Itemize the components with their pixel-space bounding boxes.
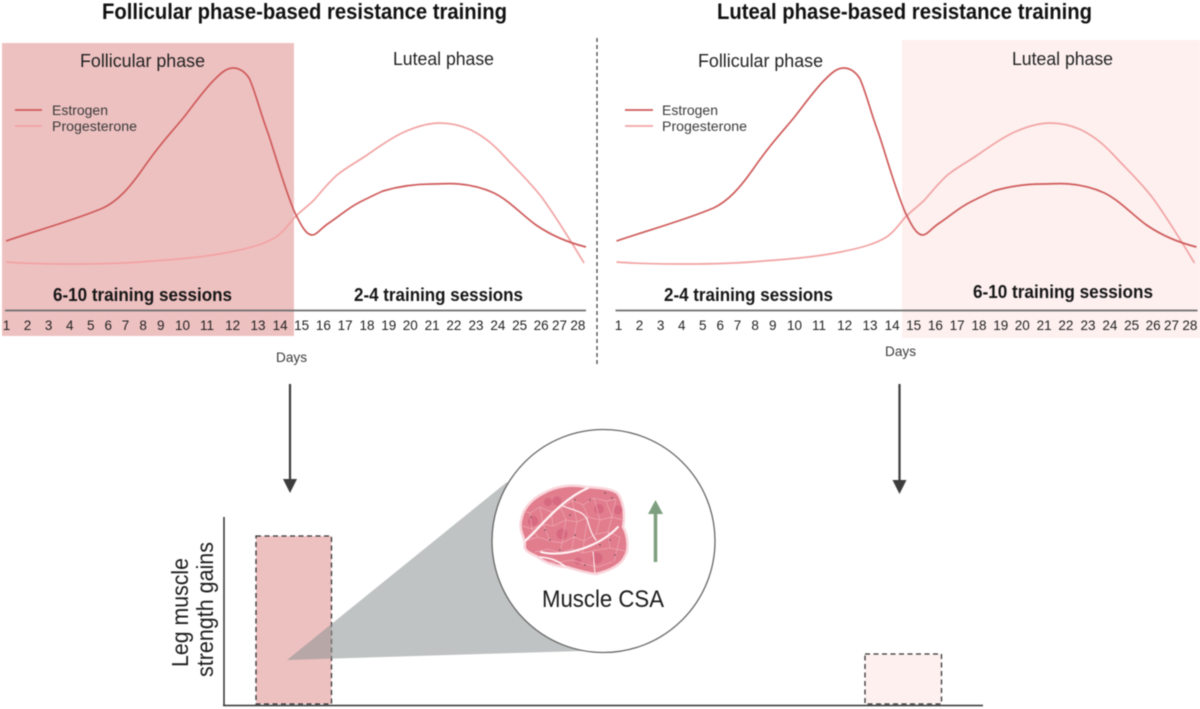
y axis label line two: strength gains (192, 542, 218, 677)
left day axis: 10 (175, 318, 190, 333)
right day axis: 21 (1037, 318, 1052, 333)
bar chart: leg muscle strength gains (167, 517, 983, 706)
left day axis: 4 (66, 318, 74, 333)
left day axis: 2 (24, 318, 31, 333)
left day axis: 23 (468, 318, 484, 333)
right day axis: 2 (636, 318, 643, 333)
panel: follicular phase-based training (2, 0, 586, 365)
left day axis: 15 (294, 318, 309, 333)
left day axis: 16 (316, 318, 331, 333)
right panel shaded luteal band (902, 40, 1200, 338)
left panel shaded follicular band (2, 43, 294, 336)
left day axis: 20 (403, 318, 418, 333)
left estrogen curve (6, 68, 586, 247)
left day axis: 19 (381, 318, 396, 333)
right days axis label: Days (885, 343, 916, 359)
left day axis: 22 (446, 318, 461, 333)
right day axis: 23 (1080, 318, 1096, 333)
right day axis: 28 (1182, 318, 1197, 333)
right day axis: 17 (950, 318, 965, 333)
arrow: muscle CSA increase (648, 500, 663, 562)
right day axis: 9 (769, 318, 776, 333)
callout circle (492, 430, 715, 652)
right progesterone curve (616, 123, 1194, 264)
left legend: Progesterone (52, 118, 137, 134)
left day axis: 21 (425, 318, 440, 333)
left legend (15, 102, 137, 134)
panel: luteal phase-based training (615, 0, 1200, 359)
left day axis: 12 (225, 318, 240, 333)
right day axis: 13 (862, 318, 878, 333)
right day axis: 24 (1102, 318, 1118, 333)
right day axis: 4 (678, 318, 686, 333)
left day axis: 9 (157, 318, 164, 333)
arrow: right panel down to bar (892, 384, 906, 494)
luteal bar (865, 654, 942, 704)
right legend: Estrogen (662, 102, 718, 118)
left day axis: 28 (570, 318, 585, 333)
y axis label: Leg muscle (167, 558, 193, 667)
right follicular phase label: Follicular phase (698, 51, 823, 71)
left days axis label: Days (276, 349, 307, 365)
right estrogen curve (616, 68, 1196, 247)
right day axis: 15 (906, 318, 921, 333)
right day axis: 26 (1146, 318, 1161, 333)
left day axis: 14 (273, 318, 288, 333)
left day axis: 24 (490, 318, 506, 333)
muscle CSA label: Muscle CSA (542, 586, 664, 613)
right day axis: 12 (837, 318, 852, 333)
left day axis: 5 (87, 318, 94, 333)
right day axis: 6 (717, 318, 724, 333)
left day axis: 11 (200, 318, 214, 333)
left day axis: 27 (552, 318, 567, 333)
callout: muscle CSA (492, 430, 715, 652)
right legend (625, 102, 747, 134)
right day axis: 7 (734, 318, 741, 333)
right luteal training sessions: 6-10 training sessions (973, 282, 1153, 302)
right day axis: 22 (1058, 318, 1073, 333)
arrow: left panel down to bar (283, 384, 297, 493)
left day axis: 3 (45, 318, 52, 333)
left day axis: 26 (534, 318, 549, 333)
right follicular training sessions: 2-4 training sessions (664, 285, 833, 305)
right day axis: 27 (1164, 318, 1179, 333)
right day axis: 11 (812, 318, 826, 333)
left progesterone curve (6, 123, 584, 264)
left day axis: 7 (122, 318, 129, 333)
right day axis: 18 (971, 318, 987, 333)
right day axis: 14 (885, 318, 900, 333)
left day axis: 13 (250, 318, 266, 333)
right day axis: 25 (1124, 318, 1139, 333)
left day axis: 17 (338, 318, 353, 333)
left follicular phase label: Follicular phase (80, 51, 205, 71)
left follicular training sessions: 6-10 training sessions (53, 285, 232, 305)
right day axis: 5 (699, 318, 706, 333)
left day axis: 18 (359, 318, 375, 333)
left day axis (3, 310, 586, 333)
icon: muscle cross-section (520, 486, 627, 574)
right day axis: 19 (993, 318, 1008, 333)
left day axis: 25 (512, 318, 527, 333)
right legend: Progesterone (662, 118, 747, 134)
callout zoom wedge (287, 482, 582, 660)
right day axis: 16 (928, 318, 943, 333)
left legend: Estrogen (52, 102, 108, 118)
right day axis: 1 (615, 318, 622, 333)
right day axis: 10 (787, 318, 802, 333)
right day axis: 3 (657, 318, 664, 333)
right luteal phase label: Luteal phase (1012, 49, 1113, 69)
left day axis: 8 (139, 318, 147, 333)
left luteal phase label: Luteal phase (393, 49, 494, 69)
right day axis: 8 (751, 318, 759, 333)
right day axis: 20 (1015, 318, 1030, 333)
left day axis: 6 (105, 318, 112, 333)
left day axis: 1 (3, 318, 10, 333)
follicular bar (256, 536, 332, 704)
right day axis (615, 310, 1198, 333)
left luteal training sessions: 2-4 training sessions (354, 285, 523, 305)
